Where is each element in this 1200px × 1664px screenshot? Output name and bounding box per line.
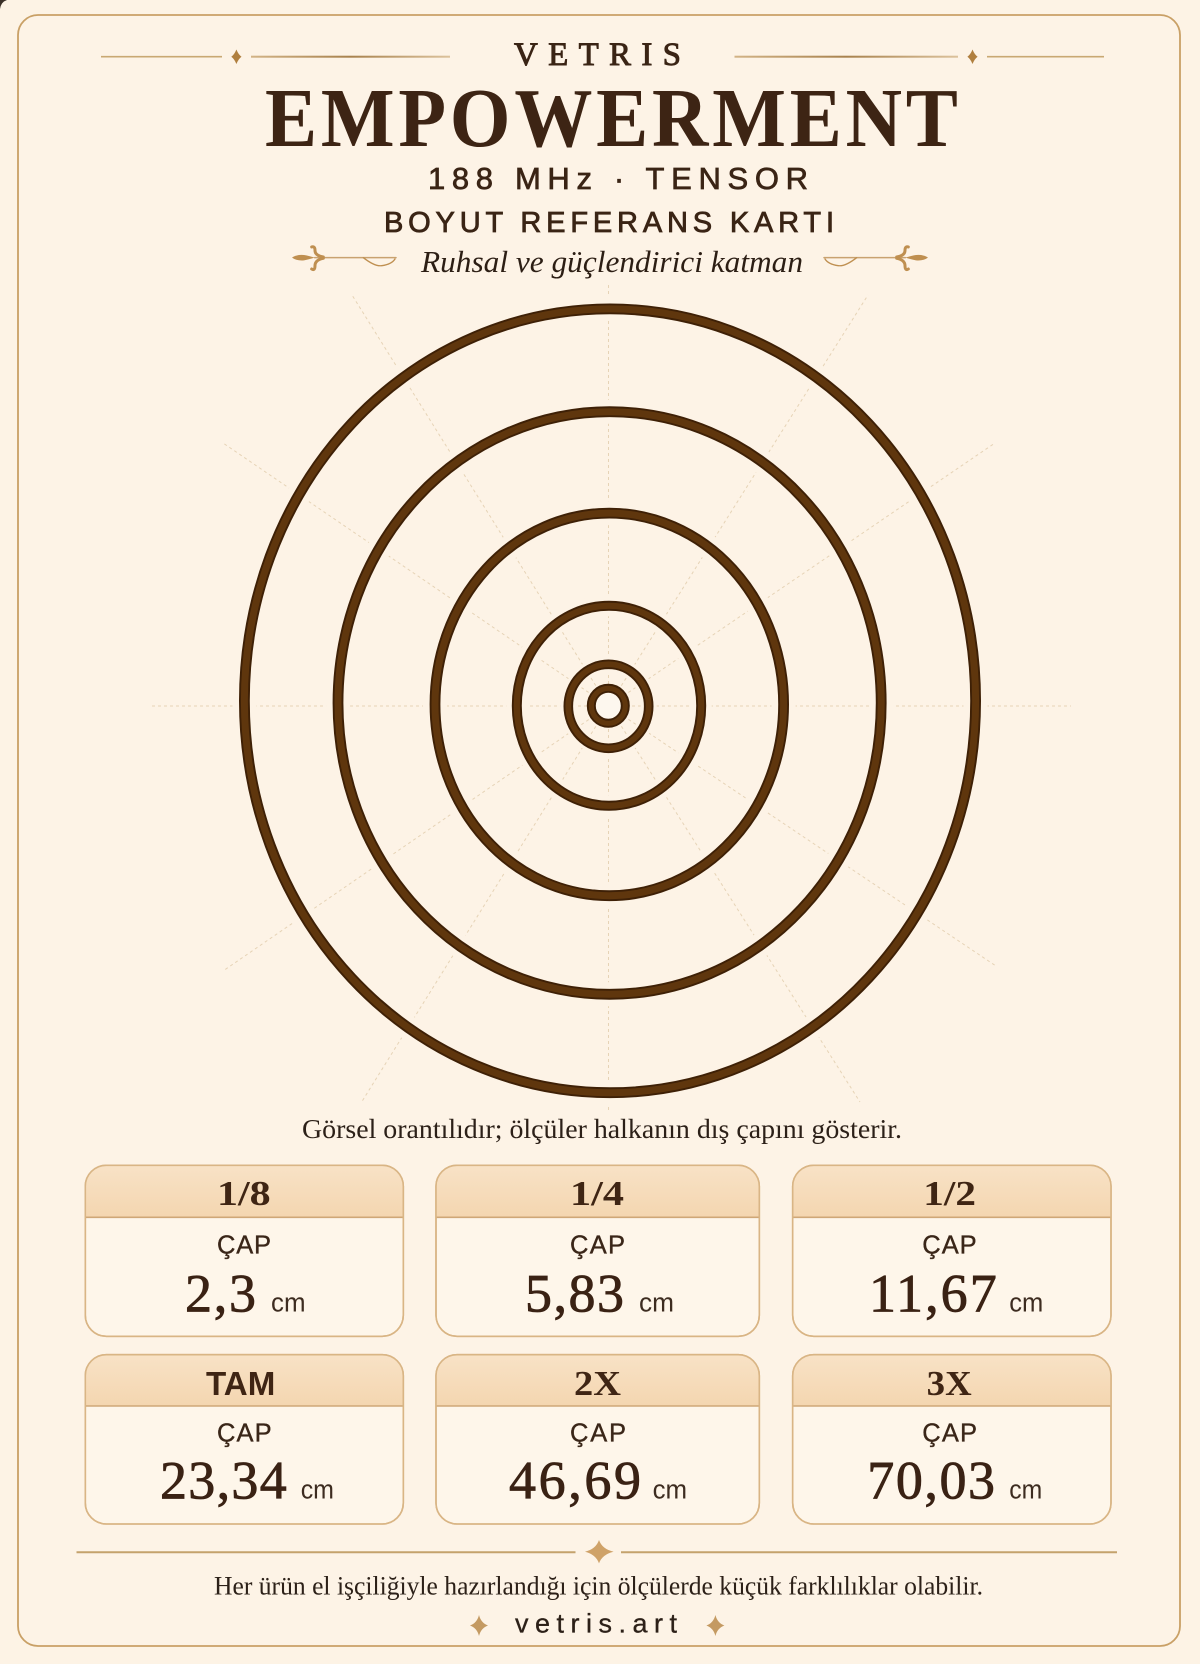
- tagline: Ruhsal ve güçlendirici katman: [420, 245, 803, 279]
- sparkle right: [706, 1615, 724, 1636]
- ring 3X outer: [244, 309, 976, 1093]
- website: vetris.art: [515, 1609, 677, 1639]
- header ornament: left rule with diamond: [101, 50, 450, 64]
- card: 3X: 3X: [927, 1365, 972, 1403]
- card subtitle: BOYUT REFERANS KARTI: [384, 207, 834, 239]
- card: 1/4: ÇAP: [570, 1231, 625, 1259]
- card: 3X: ÇAP: [922, 1420, 977, 1448]
- card: 3X: cm: [1009, 1474, 1042, 1504]
- card: 3X: [793, 1355, 1111, 1524]
- card: 1/2: ÇAP: [922, 1231, 977, 1259]
- title: EMPOWERMENT: [265, 71, 958, 165]
- ring 1/2: [517, 606, 701, 806]
- footer divider: [76, 1540, 1117, 1563]
- card: 2X: 2X: [574, 1365, 621, 1403]
- card: 1/2: 11,67: [869, 1264, 997, 1324]
- tagline flourish left: [292, 247, 396, 270]
- card: 1/8: cm: [271, 1288, 306, 1318]
- card: 1/8: 1/8: [217, 1175, 271, 1213]
- footer note: Her ürün el işçiliğiyle hazırlandığı için ölçülerde küçük farklılıklar olabilir.: [214, 1572, 983, 1601]
- brand name: VETRIS: [514, 37, 681, 73]
- ring 1/8: [591, 688, 625, 723]
- card: 1/2: 1/2: [923, 1175, 976, 1213]
- sparkle left: [470, 1615, 488, 1636]
- card: TAM: 23,34: [160, 1450, 287, 1510]
- ring full: [435, 513, 784, 896]
- card: TAM: cm: [301, 1474, 334, 1504]
- card: 1/2: [793, 1165, 1111, 1336]
- card: 1/4: cm: [639, 1288, 674, 1318]
- card: 1/4: 1/4: [570, 1175, 624, 1213]
- scale note: Görsel orantılıdır; ölçüler halkanın dış çapını gösterir.: [302, 1114, 902, 1144]
- card: 3X: 70,03: [867, 1450, 995, 1510]
- card: 2X: [436, 1355, 759, 1524]
- tagline flourish right: [824, 247, 928, 270]
- card: 1/4: [436, 1165, 759, 1336]
- card: 1/8: [85, 1165, 403, 1336]
- ring 2X: [338, 412, 881, 994]
- ring diagram: [152, 285, 1071, 1111]
- card: 2X: 46,69: [509, 1450, 641, 1510]
- radial guide lines: [152, 285, 1071, 1111]
- card: 1/8: 2,3: [185, 1264, 256, 1324]
- card: 2X: cm: [653, 1474, 687, 1504]
- ring 1/4: [568, 664, 649, 748]
- card: 1/8: ÇAP: [217, 1231, 271, 1259]
- header ornament: right rule with diamond: [734, 50, 1104, 64]
- card: 2X: ÇAP: [570, 1420, 626, 1448]
- card: 1/2: cm: [1009, 1288, 1043, 1318]
- card: 1/4: 5,83: [525, 1264, 624, 1324]
- card: TAM: [85, 1355, 403, 1524]
- card: TAM: ÇAP: [217, 1420, 272, 1448]
- card: TAM: TAM: [206, 1366, 275, 1403]
- frequency subtitle: 188 MHz · TENSOR: [428, 161, 808, 196]
